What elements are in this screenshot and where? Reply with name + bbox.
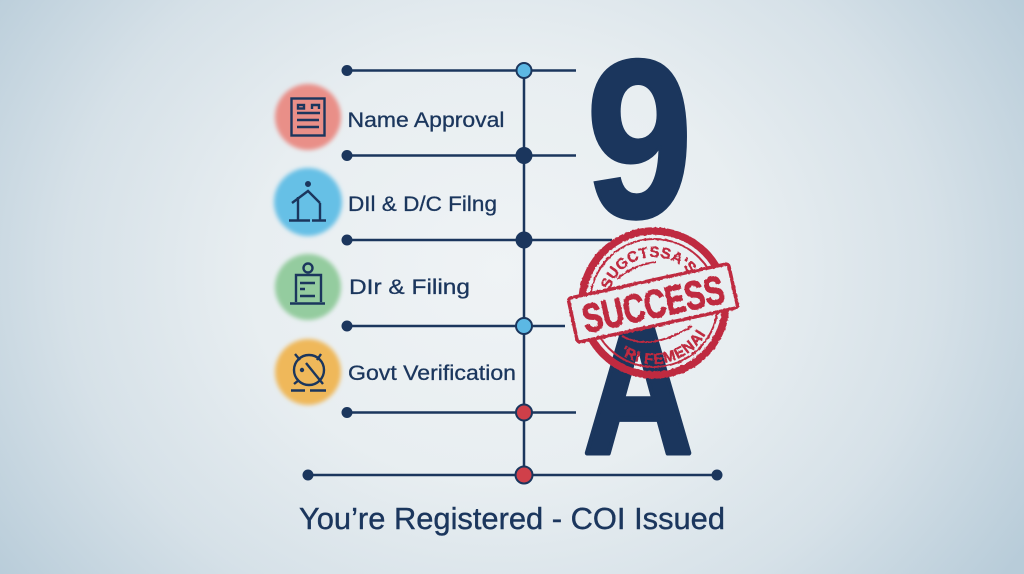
stamp rings xyxy=(582,231,726,375)
label: Govt Verification xyxy=(348,362,516,385)
row line 1 xyxy=(342,63,576,78)
icon: document on red circle xyxy=(275,84,341,150)
big character A: A xyxy=(583,280,693,494)
row line 5 xyxy=(342,404,576,420)
label: DIr & Filing xyxy=(349,276,470,299)
stamp arc text xyxy=(601,246,706,364)
icon: clock on amber circle xyxy=(275,339,341,405)
row line 6 xyxy=(302,466,722,484)
icon: form on green circle xyxy=(275,254,341,320)
timeline xyxy=(302,63,722,484)
label: DIl & D/C Filng xyxy=(348,193,497,216)
vertical spine xyxy=(523,70,525,476)
step 1: name approval xyxy=(275,84,504,150)
stamp banner: SUCCESS xyxy=(578,268,728,342)
step 4: government verification xyxy=(275,339,516,405)
step 2: DIN and DSC filing xyxy=(274,168,497,236)
success stamp xyxy=(566,226,740,380)
big character 9: 9 xyxy=(586,13,693,265)
stamp arc text: SUGCTSSA'S xyxy=(601,246,696,288)
label: Name Approval xyxy=(348,109,504,132)
row line 3 xyxy=(342,232,612,248)
icon: building on blue circle xyxy=(274,168,342,236)
row line 4 xyxy=(342,318,565,334)
step 3: DIR filing xyxy=(275,254,470,320)
footer caption: You’re Registered - COI Issued xyxy=(299,501,725,536)
stamp arc text: 'RI FEMENAI xyxy=(624,328,706,364)
row line 2 xyxy=(342,147,576,164)
